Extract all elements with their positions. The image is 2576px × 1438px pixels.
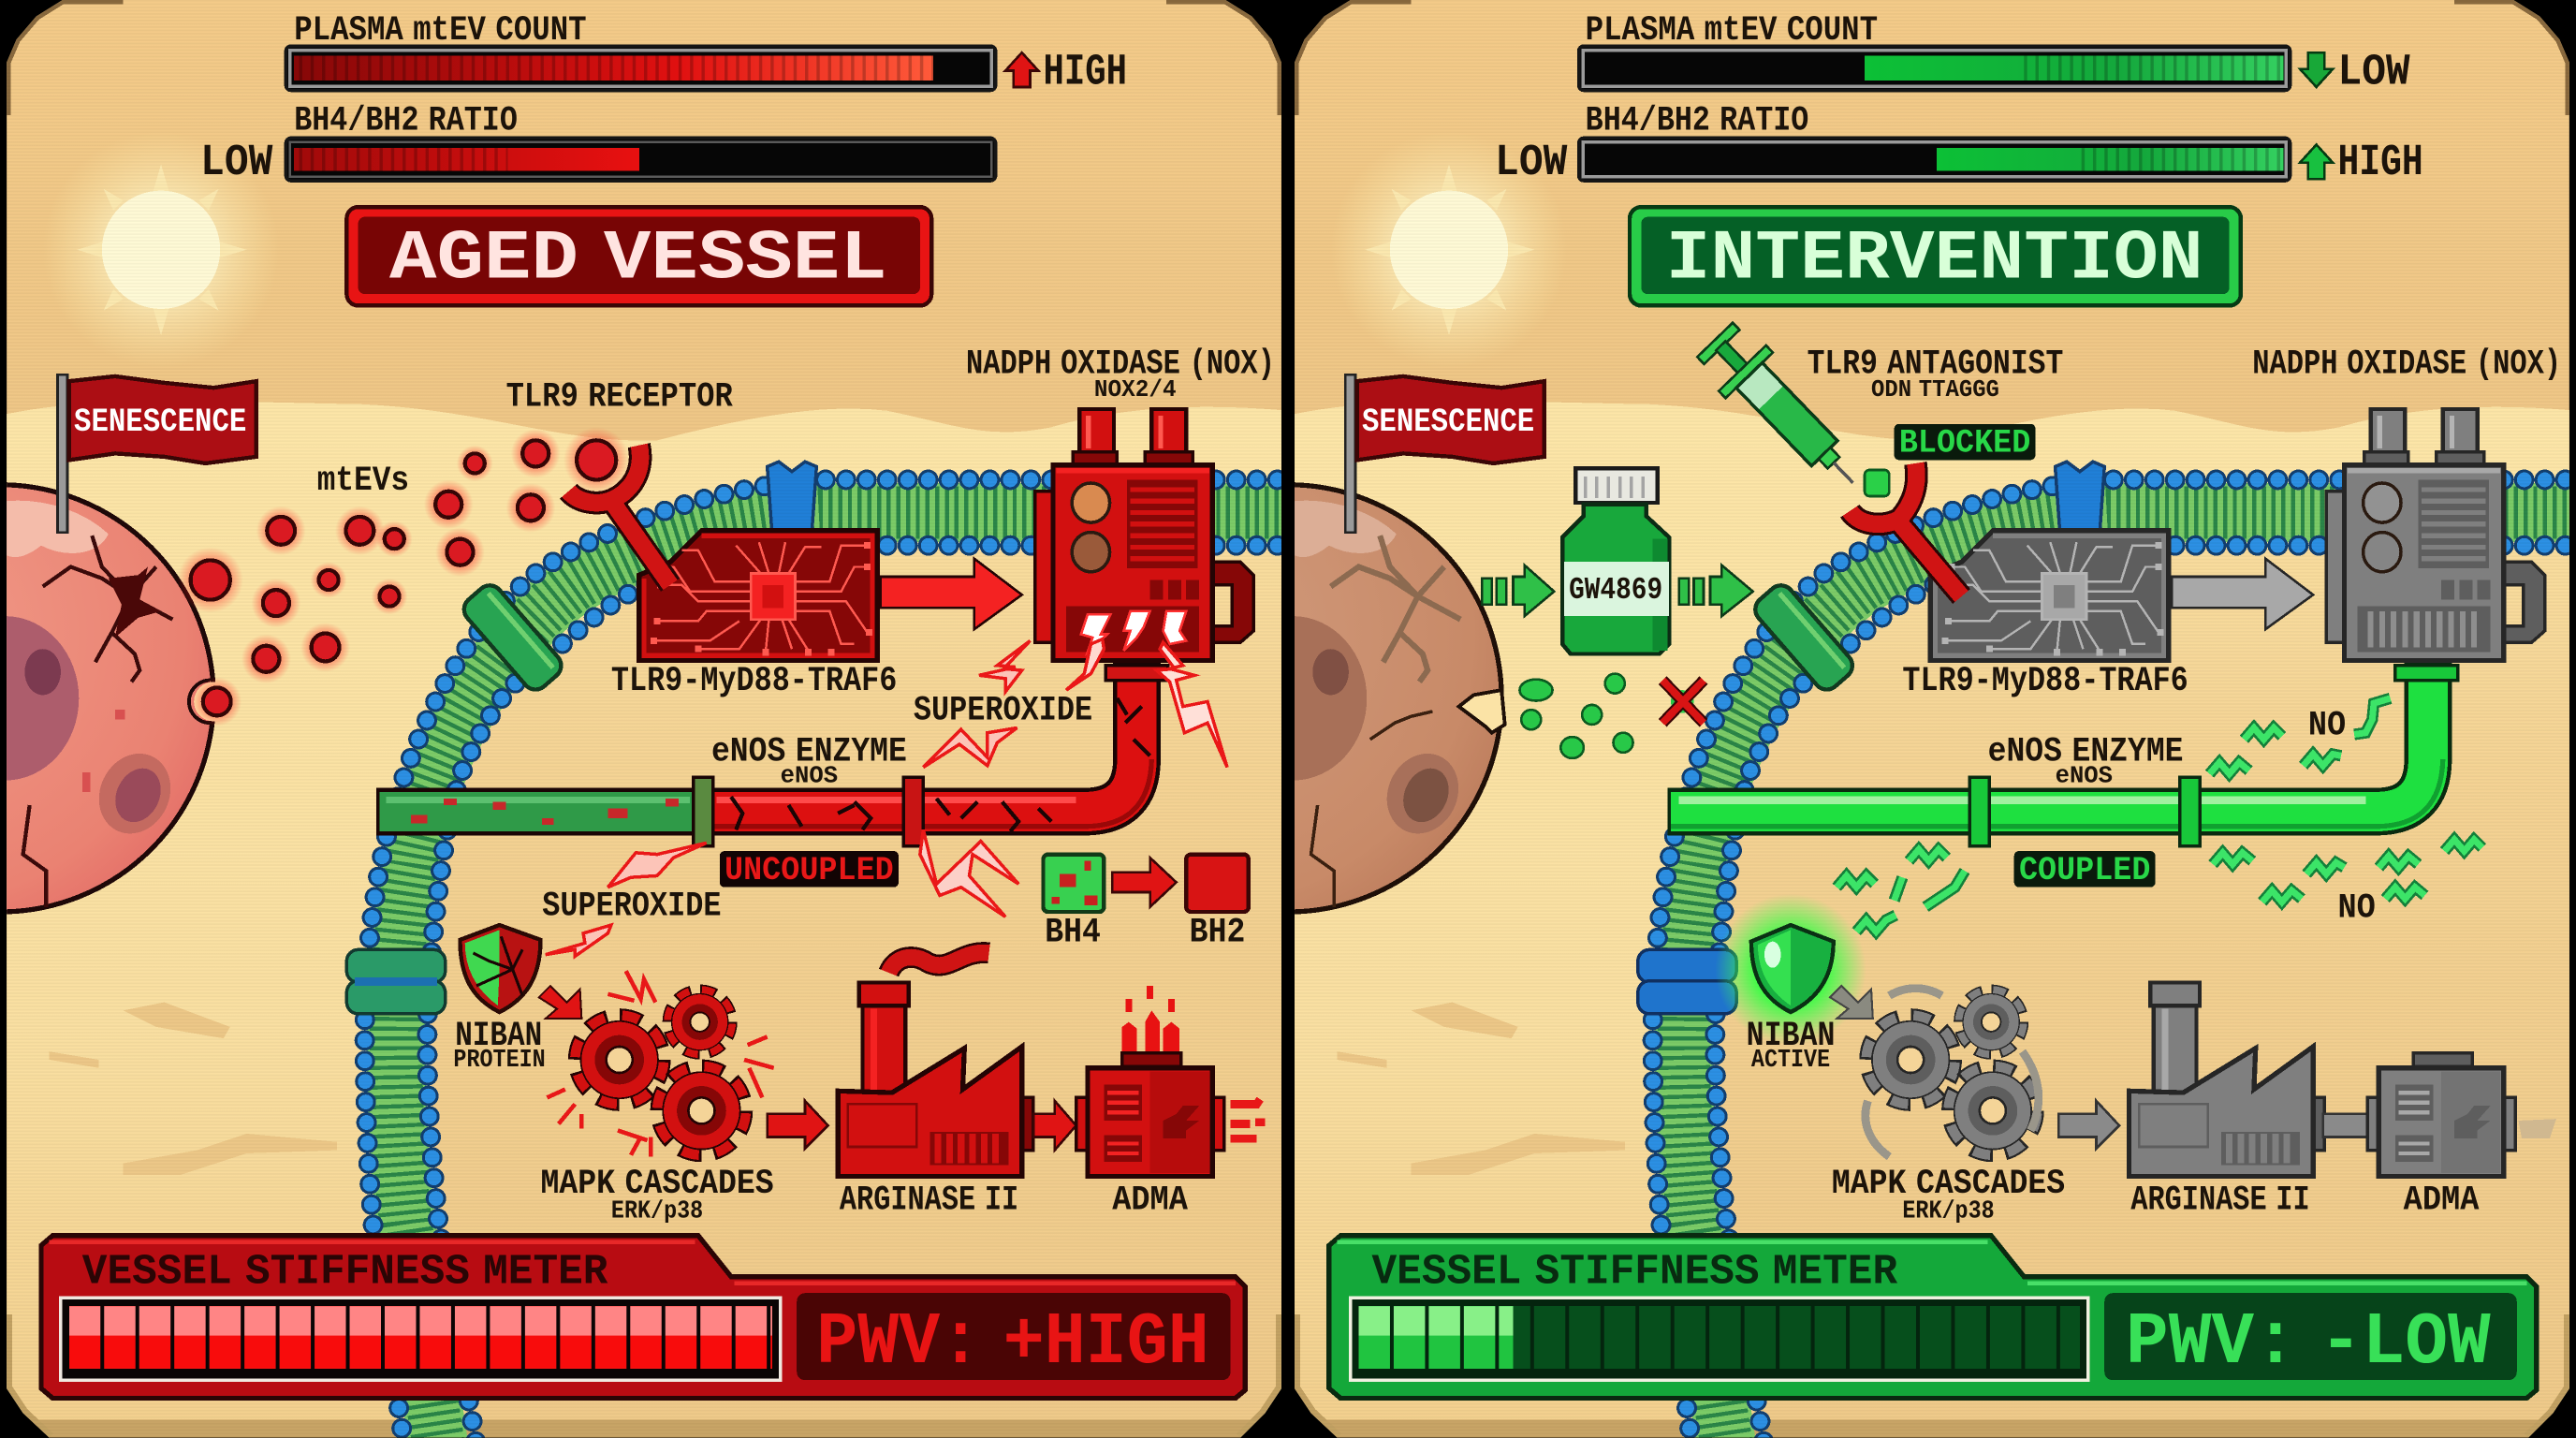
membrane channel lower	[1638, 949, 1736, 1014]
vessel stiffness meter	[1329, 1236, 2537, 1399]
lightning in NOX	[1081, 611, 1186, 653]
top gauge: plasma mtEV count: LOW	[2337, 49, 2410, 98]
NIBAN label: PROTEIN	[453, 1046, 546, 1075]
NOX labels: NADPH OXIDASE (NOX)	[966, 345, 1275, 384]
factory: arginase II inactive	[2130, 983, 2324, 1177]
NADPH oxidase machine	[1035, 409, 1253, 661]
MAPK gears	[577, 990, 744, 1153]
TLR9 antagonist label	[1808, 345, 2063, 404]
arrow from shield	[539, 986, 581, 1019]
coupled badge: COUPLED	[2019, 852, 2150, 889]
connector to ADMA	[2323, 1114, 2369, 1137]
title: intervention	[1630, 207, 2241, 305]
NIBAN label: NIBAN	[455, 1017, 542, 1056]
enzyme complex	[639, 531, 877, 661]
NO label lower: NO	[2337, 888, 2376, 928]
MAPK label: ERK/p38	[611, 1196, 703, 1225]
nitric oxide squiggles	[1837, 698, 2482, 932]
eNOS label	[1988, 733, 2183, 789]
panel backdrop	[1288, 0, 2576, 1438]
NIBAN label	[1747, 1017, 1835, 1075]
NIBAN label: ACTIVE	[1751, 1046, 1830, 1075]
eNOS pipe: uncoupled	[376, 662, 1168, 846]
blocked vesicles	[1519, 674, 1633, 758]
panel backdrop	[0, 0, 1298, 1438]
top gauge: BH4/BH2 ratio: HIGH	[2337, 139, 2423, 188]
NOX labels: NOX2/4	[1094, 375, 1177, 404]
ADMA machine	[1076, 1053, 1224, 1177]
vessel stiffness meter: PWV: +HIGH	[816, 1300, 1209, 1385]
MAPK label: ERK/p38	[1902, 1196, 1995, 1225]
title: aged vessel: AGED VESSEL	[389, 219, 887, 300]
blocked vesicle with red X	[1662, 681, 1704, 723]
BH4 to BH2 conversion	[1044, 855, 1249, 953]
arginase label: ARGINASE II	[840, 1181, 1018, 1221]
arginase label: ARGINASE II	[2130, 1181, 2310, 1221]
membrane channel	[459, 580, 566, 695]
vessel stiffness meter	[41, 1236, 1245, 1399]
right panel: intervention	[1295, 0, 2569, 1438]
top gauge: BH4/BH2 ratio: LOW	[1495, 139, 1568, 188]
BH4 to BH2 conversion: BH2	[1190, 914, 1245, 953]
GW4869 bottle	[1562, 468, 1669, 654]
MAPK label	[1832, 1165, 2065, 1225]
arrow to arginase	[768, 1101, 828, 1149]
eNOS label: eNOS ENZYME	[1988, 733, 2183, 772]
NIBAN shield active	[1715, 894, 1866, 1045]
MAPK label: MAPK CASCADES	[540, 1165, 774, 1204]
vessel stiffness meter: PWV: -LOW	[2126, 1300, 2491, 1385]
senescent cell	[0, 485, 233, 912]
ADMA label: ADMA	[2404, 1181, 2480, 1221]
top gauge: BH4/BH2 ratio: BH4/BH2 RATIO	[1586, 102, 1808, 141]
complex label: TLR9-MyD88-TRAF6	[611, 662, 897, 701]
superoxide label lower: SUPEROXIDE	[542, 888, 722, 927]
ADMA sparks	[1231, 1099, 1265, 1138]
TLR9 antagonist label: TLR9 ANTAGONIST	[1808, 345, 2063, 384]
eNOS label	[711, 733, 907, 789]
NADPH oxidase machine inactive	[2326, 409, 2545, 661]
NIBAN shield damaged	[460, 925, 540, 1012]
gear sparks	[547, 971, 774, 1157]
MAPK label	[540, 1165, 774, 1225]
factory: arginase II	[838, 983, 1033, 1177]
eNOS label: eNOS	[781, 761, 838, 789]
membrane channel	[1750, 580, 1858, 695]
TLR9 antagonist label: ODN TTAGGG	[1871, 375, 1999, 404]
uncoupled badge: UNCOUPLED	[724, 852, 894, 889]
MAPK gears inactive	[1868, 990, 2036, 1153]
NO label upper: NO	[2308, 706, 2346, 745]
GW4869 flow arrow right	[1679, 565, 1753, 616]
arrow to NOX	[2172, 559, 2313, 629]
arrow from shield	[1830, 986, 1873, 1019]
superoxide label upper: SUPEROXIDE	[914, 692, 1092, 731]
flag: senescence	[57, 374, 256, 533]
NOX labels	[966, 345, 1275, 404]
title: aged vessel	[346, 207, 931, 305]
top gauge: BH4/BH2 ratio: BH4/BH2 RATIO	[294, 102, 518, 141]
TLR9 receptor	[568, 446, 670, 585]
recovering cell	[1295, 482, 1507, 914]
top gauge: BH4/BH2 ratio: LOW	[200, 139, 273, 188]
arrow to ADMA	[1033, 1101, 1076, 1151]
smoke	[889, 953, 989, 973]
slow rotation marks	[1866, 989, 2039, 1157]
blocked badge: BLOCKED	[1899, 425, 2030, 462]
NOX grille	[2371, 611, 2474, 647]
ADMA flames	[1122, 986, 1179, 1051]
faded output	[2519, 1119, 2556, 1138]
vessel stiffness meter: VESSEL STIFFNESS METER	[1372, 1248, 1898, 1297]
complex label: TLR9-MyD88-TRAF6	[1902, 662, 2188, 701]
eNOS label: eNOS ENZYME	[711, 733, 907, 772]
flag: senescence	[1345, 374, 1544, 533]
top gauge: plasma mtEV count: HIGH	[1044, 49, 1127, 98]
title: intervention: INTERVENTION	[1666, 219, 2203, 300]
ADMA machine inactive	[2367, 1053, 2515, 1177]
ADMA label: ADMA	[1112, 1181, 1189, 1221]
syringe	[1691, 317, 1877, 506]
NIBAN label	[453, 1017, 546, 1075]
GW4869 bottle: GW4869	[1569, 573, 1662, 609]
GW4869 flow arrow left	[1482, 565, 1554, 616]
eNOS pipe: coupled	[1667, 662, 2458, 846]
top gauge: BH4/BH2 ratio	[200, 102, 996, 188]
flag: senescence: SENESCENCE	[74, 404, 246, 441]
arrow to arginase	[2058, 1101, 2119, 1149]
top gauge: plasma mtEV count	[1579, 11, 2410, 98]
NIBAN label: NIBAN	[1747, 1017, 1835, 1056]
antagonist bead	[1865, 470, 1889, 496]
TLR9 receptor label: TLR9 RECEPTOR	[506, 377, 734, 417]
mtEV particles	[178, 427, 629, 726]
left panel: aged vessel	[0, 0, 1298, 1438]
arrow to NOX	[881, 559, 1022, 629]
BH4 to BH2 conversion: BH4	[1045, 914, 1101, 953]
membrane channel lower	[346, 949, 446, 1014]
TLR9 receptor blocked	[1850, 463, 1962, 596]
eNOS label: eNOS	[2056, 761, 2113, 789]
top gauge: plasma mtEV count	[285, 11, 1127, 98]
top gauge: plasma mtEV count: PLASMA mtEV COUNT	[1586, 11, 1878, 51]
flag: senescence: SENESCENCE	[1362, 404, 1534, 441]
top gauge: plasma mtEV count: PLASMA mtEV COUNT	[294, 11, 587, 51]
vessel stiffness meter: VESSEL STIFFNESS METER	[82, 1248, 608, 1297]
top gauge: BH4/BH2 ratio	[1495, 102, 2423, 188]
MAPK label: MAPK CASCADES	[1832, 1165, 2065, 1204]
enzyme complex inactive	[1930, 531, 2169, 661]
superoxide lightning bolts	[546, 639, 1227, 956]
mtEV label: mtEVs	[317, 462, 409, 501]
